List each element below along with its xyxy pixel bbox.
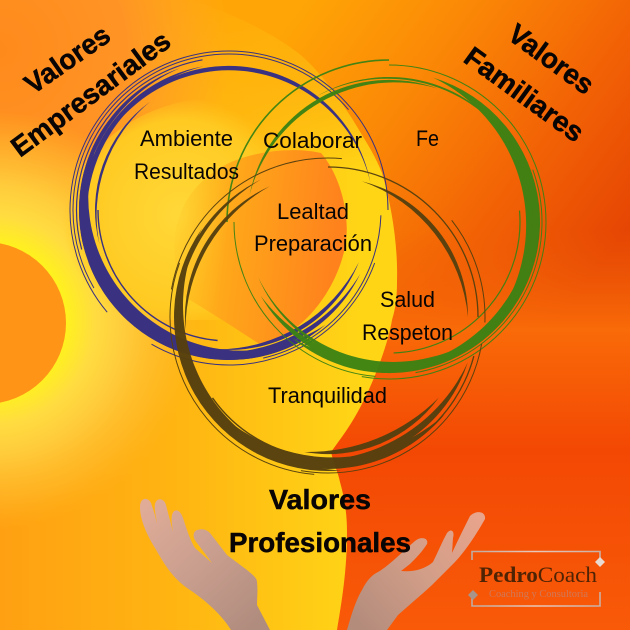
icon: left hand bbox=[140, 499, 270, 630]
left glow bbox=[0, 105, 205, 535]
icon: right hand bbox=[347, 512, 485, 630]
yellow wave panel bbox=[0, 0, 397, 630]
heading: Valores Profesionales: Profesionales bbox=[229, 527, 411, 558]
heading: Valores Empresariales: Valores bbox=[19, 19, 116, 100]
value: Colaborar: Colaborar bbox=[263, 128, 362, 153]
values: green and brown intersection bbox=[362, 287, 453, 345]
values: green and brown intersection: Salud bbox=[380, 287, 435, 312]
heading: Valores Profesionales: Valores bbox=[269, 484, 371, 515]
value: Tranquilidad: Tranquilidad bbox=[268, 383, 387, 408]
heading: Valores Empresariales: Empresariales bbox=[5, 25, 176, 163]
values: blue ring only: Ambiente bbox=[140, 126, 233, 151]
heading: Valores Familiares: Valores bbox=[502, 18, 600, 100]
inner yellow area bbox=[62, 98, 310, 320]
values: centre intersection: Preparación bbox=[254, 231, 372, 256]
logo: PedroCoach: Coaching y Consultoria bbox=[489, 589, 589, 600]
logo: PedroCoach: PedroCoach bbox=[479, 562, 597, 587]
orange circle left bbox=[0, 242, 66, 404]
values: centre intersection: Lealtad bbox=[277, 199, 349, 224]
central orange shape bbox=[174, 150, 347, 345]
values: blue ring only bbox=[134, 126, 239, 184]
ring: Valores Profesionales (brown) bbox=[108, 97, 548, 537]
top-left orange sweep bbox=[0, 0, 235, 285]
values: centre intersection bbox=[254, 199, 372, 256]
logo: PedroCoach bbox=[468, 552, 605, 606]
ring: Valores Empresariales (blue) bbox=[5, 0, 453, 434]
heading: Valores Familiares: Familiares bbox=[458, 41, 590, 148]
heading: Valores Profesionales bbox=[229, 484, 411, 558]
values: blue ring only: Resultados bbox=[134, 159, 239, 184]
values: green and brown intersection: Respeton bbox=[362, 320, 453, 345]
value: Fe: Fe bbox=[416, 126, 439, 151]
ring: Valores Familiares (green) bbox=[193, 26, 585, 418]
